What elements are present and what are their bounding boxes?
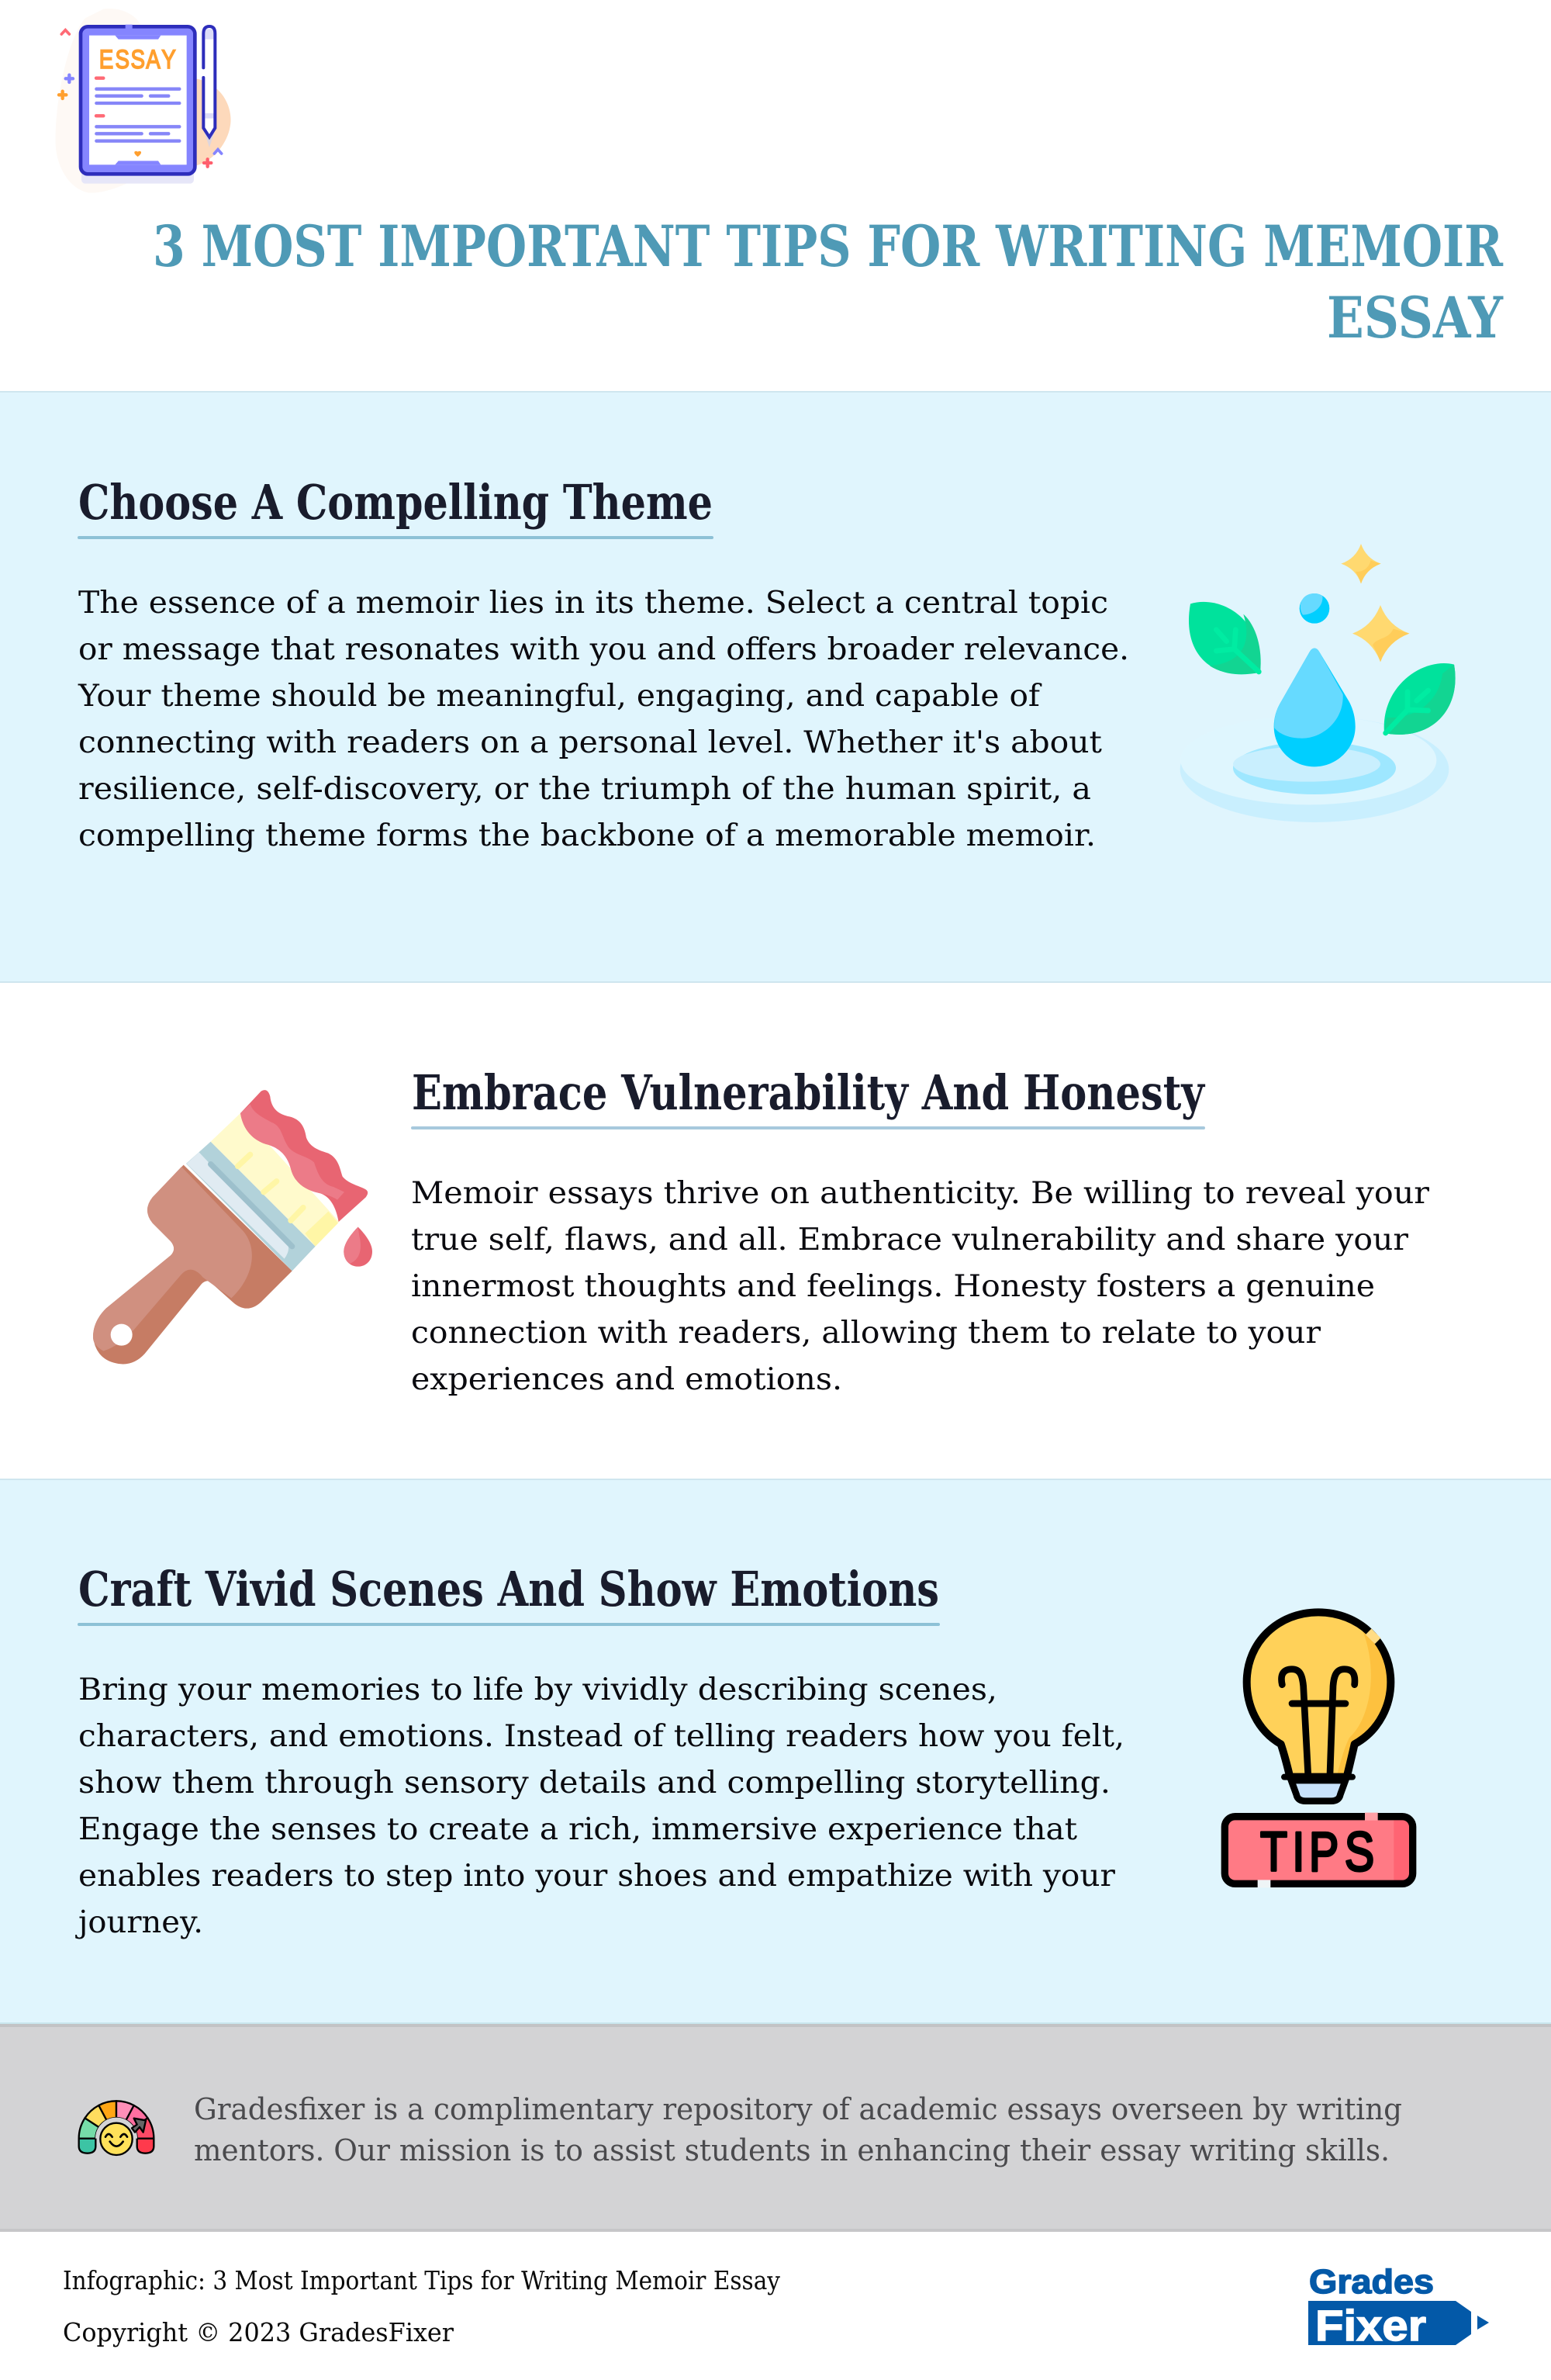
panel: about gradesfixer: [0, 2024, 1551, 2232]
panel: craft vivid scenes and show emotions: [0, 1479, 1551, 2024]
body text: experiences and emotions.: [411, 1362, 842, 1397]
heading underline: [78, 1623, 940, 1626]
body text: or message that resonates with you and offers broader relevance.: [78, 632, 1129, 667]
icon: paint brush: [93, 1090, 372, 1364]
icon: water drop with leaves: [1180, 544, 1456, 822]
body text: show them through sensory details and compelling storytelling.: [78, 1766, 1111, 1801]
title: [153, 213, 1504, 351]
body text: resilience, self-discovery, or the triumph of the human spirit, a: [78, 772, 1091, 807]
about text: mentors. Our mission is to assist students in enhancing their essay writing skills.: [194, 2133, 1390, 2167]
body text: innermost thoughts and feelings. Honesty fosters a genuine: [411, 1269, 1375, 1304]
icon: light bulb with tips sign: [1225, 1612, 1413, 1884]
body text: connecting with readers on a personal level. Whether it's about: [78, 725, 1102, 760]
about text: Gradesfixer is a complimentary repository of academic essays overseen by writing: [194, 2092, 1402, 2126]
header: [56, 9, 1504, 351]
heading: Embrace Vulnerability And Honesty: [412, 1064, 1206, 1121]
panel: embrace vulnerability and honesty: [0, 983, 1551, 1479]
heading underline: [411, 1126, 1205, 1129]
icon: essay tablet and pen: ESSAY: [99, 44, 176, 74]
body text: connection with readers, allowing them to relate to your: [411, 1316, 1321, 1351]
footer credits: Infographic: 3 Most Important Tips for Writing Memoir Essay: [63, 2265, 780, 2295]
icon: light bulb with tips sign: TIPS: [1260, 1821, 1374, 1883]
body text: [78, 586, 1129, 853]
heading: Craft Vivid Scenes And Show Emotions: [78, 1561, 939, 1617]
logo: gradesfixer: Grades: [1309, 2263, 1434, 2301]
footer: [63, 2263, 1489, 2350]
icon: essay tablet and pen: [56, 9, 231, 193]
body text: Memoir essays thrive on authenticity. Be willing to reveal your: [411, 1176, 1429, 1211]
body text: Bring your memories to life by vividly describing scenes,: [78, 1673, 997, 1707]
body text: journey.: [75, 1905, 203, 1940]
logo: gradesfixer: Fixer: [1315, 2301, 1426, 2350]
heading underline: [78, 536, 713, 539]
about text: [194, 2092, 1402, 2167]
body text: Your theme should be meaningful, engaging, and capable of: [78, 679, 1042, 714]
body text: The essence of a memoir lies in its theme. Select a central topic: [78, 586, 1108, 621]
icon: mood gauge: [79, 2101, 154, 2155]
heading: Choose A Compelling Theme: [78, 474, 713, 531]
body text: [411, 1176, 1429, 1397]
title: ESSAY: [1327, 285, 1504, 351]
panel: choose a compelling theme: [0, 391, 1551, 983]
body text: Engage the senses to create a rich, immersive experience that: [78, 1812, 1077, 1847]
logo: gradesfixer: [1308, 2263, 1489, 2350]
body text: characters, and emotions. Instead of telling readers how you felt,: [78, 1719, 1124, 1754]
body text: true self, flaws, and all. Embrace vulnerability and share your: [411, 1223, 1408, 1257]
body text: [75, 1673, 1124, 1940]
footer credits: [63, 2265, 780, 2347]
body text: enables readers to step into your shoes and empathize with your: [78, 1859, 1115, 1894]
body text: compelling theme forms the backbone of a memorable memoir.: [78, 818, 1096, 853]
footer credits: Copyright © 2023 GradesFixer: [63, 2317, 454, 2347]
